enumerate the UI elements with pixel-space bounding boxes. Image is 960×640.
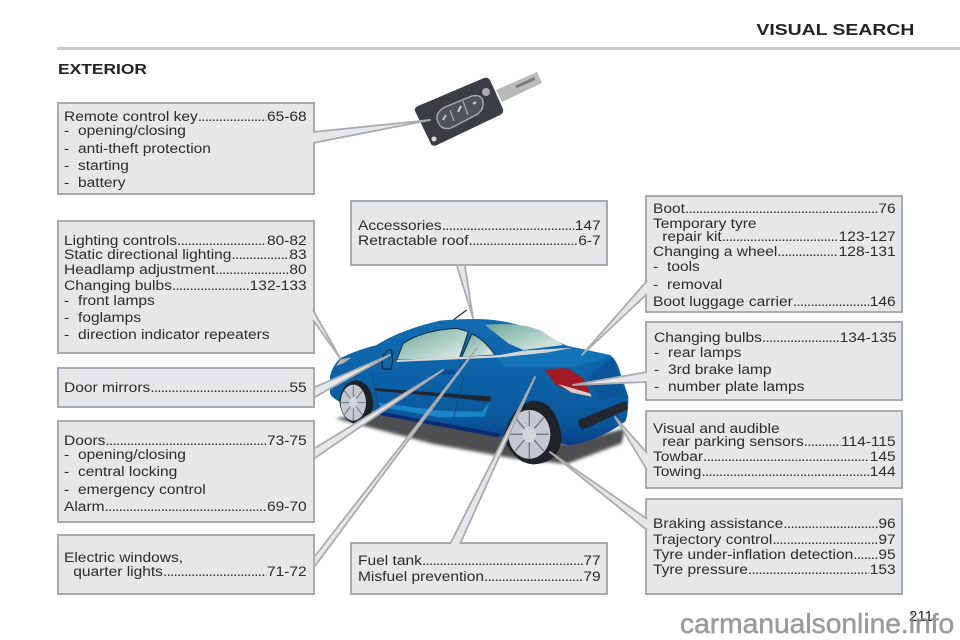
entry: headlamp adjustment xyxy=(64,262,307,277)
entry: towbar: Towbar xyxy=(653,449,703,464)
entry: alarm: 69-70 xyxy=(267,499,307,514)
sub-item: opening/closing: - xyxy=(64,447,69,462)
door handle xyxy=(440,369,455,375)
sub-item: direction indicator repeaters: - xyxy=(64,327,69,342)
entry: doors: Doors xyxy=(64,433,105,448)
entry: changing a wheel xyxy=(653,244,896,259)
tail lamp xyxy=(545,368,592,397)
rear quarter window xyxy=(462,334,495,357)
entry: retractable roof: Retractable roof xyxy=(358,233,468,248)
entry: alarm: Alarm xyxy=(64,499,105,514)
entry: tyre pressure xyxy=(653,562,896,578)
leader: remote control key xyxy=(313,120,430,143)
header rule xyxy=(57,47,960,50)
leader: electric windows xyxy=(315,348,477,566)
sub-item: starting: starting xyxy=(78,158,129,173)
panel: boot xyxy=(645,195,903,313)
entry: temporary tyre: Temporary tyre xyxy=(653,216,757,231)
entry: changing a wheel: Changing a wheel xyxy=(653,244,777,259)
entry: changing bulbs: Changing bulbs xyxy=(64,278,172,293)
rear bumper strip xyxy=(578,401,628,429)
antenna xyxy=(453,310,467,320)
watermark: carmanualsonline.info xyxy=(680,607,954,639)
entry: braking assistance: 96 xyxy=(878,516,896,531)
entry: lighting controls: 80-82 xyxy=(267,233,307,248)
sub-item: anti-theft protection: - xyxy=(64,141,69,156)
headlamp xyxy=(336,357,352,366)
entry: fuel tank: Fuel tank xyxy=(358,553,422,568)
entry: changing bulbs: Changing bulbs xyxy=(654,330,762,345)
entry: trajectory control xyxy=(653,532,896,548)
panel: door mirrors xyxy=(57,367,315,408)
entry: changing bulbs: 132-133 xyxy=(250,278,307,293)
sub-item: front lamps: front lamps xyxy=(78,293,155,308)
entry: repair kit: repair kit xyxy=(662,229,722,244)
rear panel xyxy=(588,357,625,401)
panel: parking and towing xyxy=(645,410,903,489)
entry: misfuel prevention: Misfuel prevention xyxy=(358,569,484,584)
entry: changing bulbs xyxy=(654,330,897,345)
entry: towbar xyxy=(653,449,896,464)
entry: door mirrors: Door mirrors xyxy=(64,380,150,395)
entry: accessories xyxy=(358,218,601,233)
entry: lighting controls: Lighting controls xyxy=(64,233,177,248)
page number: 211 xyxy=(909,608,933,625)
sub-item: anti-theft protection: anti-theft protection xyxy=(78,141,211,156)
leader: doors xyxy=(315,370,443,458)
entry: misfuel prevention xyxy=(358,569,601,584)
front side window xyxy=(397,328,468,360)
panel: rear bulbs xyxy=(645,321,903,401)
sub-item: emergency control: emergency control xyxy=(78,482,206,497)
panel: lighting xyxy=(57,220,315,354)
sub-item: rear lamps: - xyxy=(654,345,659,360)
sub-item: removal: removal xyxy=(667,277,722,292)
car illustration xyxy=(330,310,628,464)
entry: boot luggage carrier xyxy=(653,294,896,309)
entry: doors xyxy=(64,433,307,448)
sub-item: rear lamps: rear lamps xyxy=(668,345,741,360)
entry: retractable roof xyxy=(358,233,601,248)
sub-item: direction indicator repeaters: direction indicator repeaters xyxy=(78,327,270,342)
entry: quarter lights: quarter lights xyxy=(73,564,163,579)
panel: accessories xyxy=(350,200,608,266)
entry: misfuel prevention: 79 xyxy=(583,569,601,584)
entry: remote control key: Remote control key xyxy=(64,109,198,124)
entry: headlamp adjustment: 80 xyxy=(289,262,307,277)
door outline xyxy=(372,360,463,418)
sub-item: tools: - xyxy=(653,259,658,274)
sub-item: central locking: central locking xyxy=(78,464,177,479)
entry: trajectory control: 97 xyxy=(878,532,896,547)
entry: quarter lights xyxy=(73,564,307,579)
sub-item: foglamps: foglamps xyxy=(78,310,141,325)
panel: remote control key xyxy=(57,102,315,195)
entry: static directional lighting: 83 xyxy=(289,247,307,262)
entry: accessories: 147 xyxy=(575,218,601,233)
entry: tyre pressure: Tyre pressure xyxy=(653,562,748,577)
entry: towing: Towing xyxy=(653,464,701,479)
leader: parking and towing xyxy=(615,417,647,470)
sub-item: 3rd brake lamp: 3rd brake lamp xyxy=(668,362,772,377)
entry: tyre pressure: 153 xyxy=(870,562,896,577)
entry: rear parking sensors: 114-115 xyxy=(841,434,896,449)
entry: towing: 144 xyxy=(870,464,896,479)
car shadow xyxy=(335,412,625,464)
sub-item: number plate lamps: - xyxy=(654,379,659,394)
leader: door mirrors xyxy=(315,355,390,397)
title: visual search: VISUAL SEARCH xyxy=(756,22,914,39)
entry: boot: 76 xyxy=(878,201,896,216)
entry: fuel tank xyxy=(358,553,601,568)
entry: remote control key xyxy=(64,109,307,124)
entry: tyre under-inflation detection: Tyre under-inflation detection xyxy=(653,547,853,562)
leader: boot xyxy=(582,281,647,355)
entry: braking assistance xyxy=(653,516,896,531)
entry: alarm xyxy=(64,499,307,514)
leader: rear bulbs xyxy=(573,372,647,385)
car body xyxy=(330,319,628,446)
sub-item: opening/closing: - xyxy=(64,123,69,138)
sub-item: emergency control: - xyxy=(64,482,69,497)
sub-item: foglamps: - xyxy=(64,310,69,325)
side rub strip xyxy=(374,388,492,402)
entry: changing a wheel: 128-131 xyxy=(839,244,896,259)
panel: fuel xyxy=(350,542,608,595)
entry: changing bulbs xyxy=(64,278,307,293)
leader: fuel xyxy=(450,377,535,544)
rear wheel xyxy=(503,401,562,464)
entry: towbar: 145 xyxy=(870,449,896,464)
panel: doors xyxy=(57,420,315,523)
leader: lighting xyxy=(313,310,340,358)
entry: doors: 73-75 xyxy=(267,433,307,448)
entry: boot: Boot xyxy=(653,201,685,216)
entry: electric windows: Electric windows, xyxy=(64,550,183,565)
entry: boot luggage carrier: 146 xyxy=(870,294,896,309)
front wheel xyxy=(339,380,373,424)
entry: static directional lighting xyxy=(64,247,307,262)
entry: trajectory control: Trajectory control xyxy=(653,532,772,547)
sub-item: opening/closing: opening/closing xyxy=(78,447,186,462)
entry: towing xyxy=(653,464,896,479)
entry: fuel tank: 77 xyxy=(583,553,601,568)
entry: lighting controls xyxy=(64,233,307,248)
entry: braking assistance: Braking assistance xyxy=(653,516,783,531)
sub-item: front lamps: - xyxy=(64,293,69,308)
sub-item: starting: - xyxy=(64,158,69,173)
leader: braking and tyres xyxy=(550,452,647,530)
sub-item: 3rd brake lamp: - xyxy=(654,362,659,377)
heading: exterior: EXTERIOR xyxy=(58,62,147,78)
waistline trim xyxy=(397,348,573,362)
entry: repair kit xyxy=(662,229,896,244)
panel: braking and tyres xyxy=(645,498,903,595)
sub-item: removal: - xyxy=(653,277,658,292)
entry: accessories: Accessories xyxy=(358,218,442,233)
sub-item: opening/closing: opening/closing xyxy=(78,123,186,138)
entry: boot luggage carrier: Boot luggage carrier xyxy=(653,294,793,309)
door sill highlight xyxy=(378,402,490,417)
entry: retractable roof: 6-7 xyxy=(578,233,601,248)
entry: headlamp adjustment: Headlamp adjustment xyxy=(64,262,215,277)
door mirror xyxy=(382,350,393,369)
rear window xyxy=(485,324,563,350)
entry: door mirrors xyxy=(64,380,307,395)
entry: quarter lights: 71-72 xyxy=(267,564,307,579)
entry: changing bulbs: 134-135 xyxy=(840,330,897,345)
icon: remote control key xyxy=(415,72,542,146)
panel: electric windows xyxy=(57,534,315,595)
entry: remote control key: 65-68 xyxy=(267,109,307,124)
entry: rear parking sensors: rear parking sensors xyxy=(662,434,804,449)
entry: static directional lighting: Static directional lighting xyxy=(64,247,231,262)
entry: visual and audible: Visual and audible xyxy=(653,421,780,436)
sub-item: battery: battery xyxy=(78,175,125,190)
sub-item: central locking: - xyxy=(64,464,69,479)
boot lid xyxy=(500,348,612,367)
sub-item: tools: tools xyxy=(667,259,700,274)
sub-item: battery: - xyxy=(64,175,69,190)
leader: accessories xyxy=(457,266,473,318)
entry: tyre under-inflation detection: 95 xyxy=(878,547,896,562)
entry: door mirrors: 55 xyxy=(289,380,307,395)
sub-item: number plate lamps: number plate lamps xyxy=(668,379,804,394)
entry: rear parking sensors xyxy=(662,434,896,449)
entry: repair kit: 123-127 xyxy=(839,229,896,244)
